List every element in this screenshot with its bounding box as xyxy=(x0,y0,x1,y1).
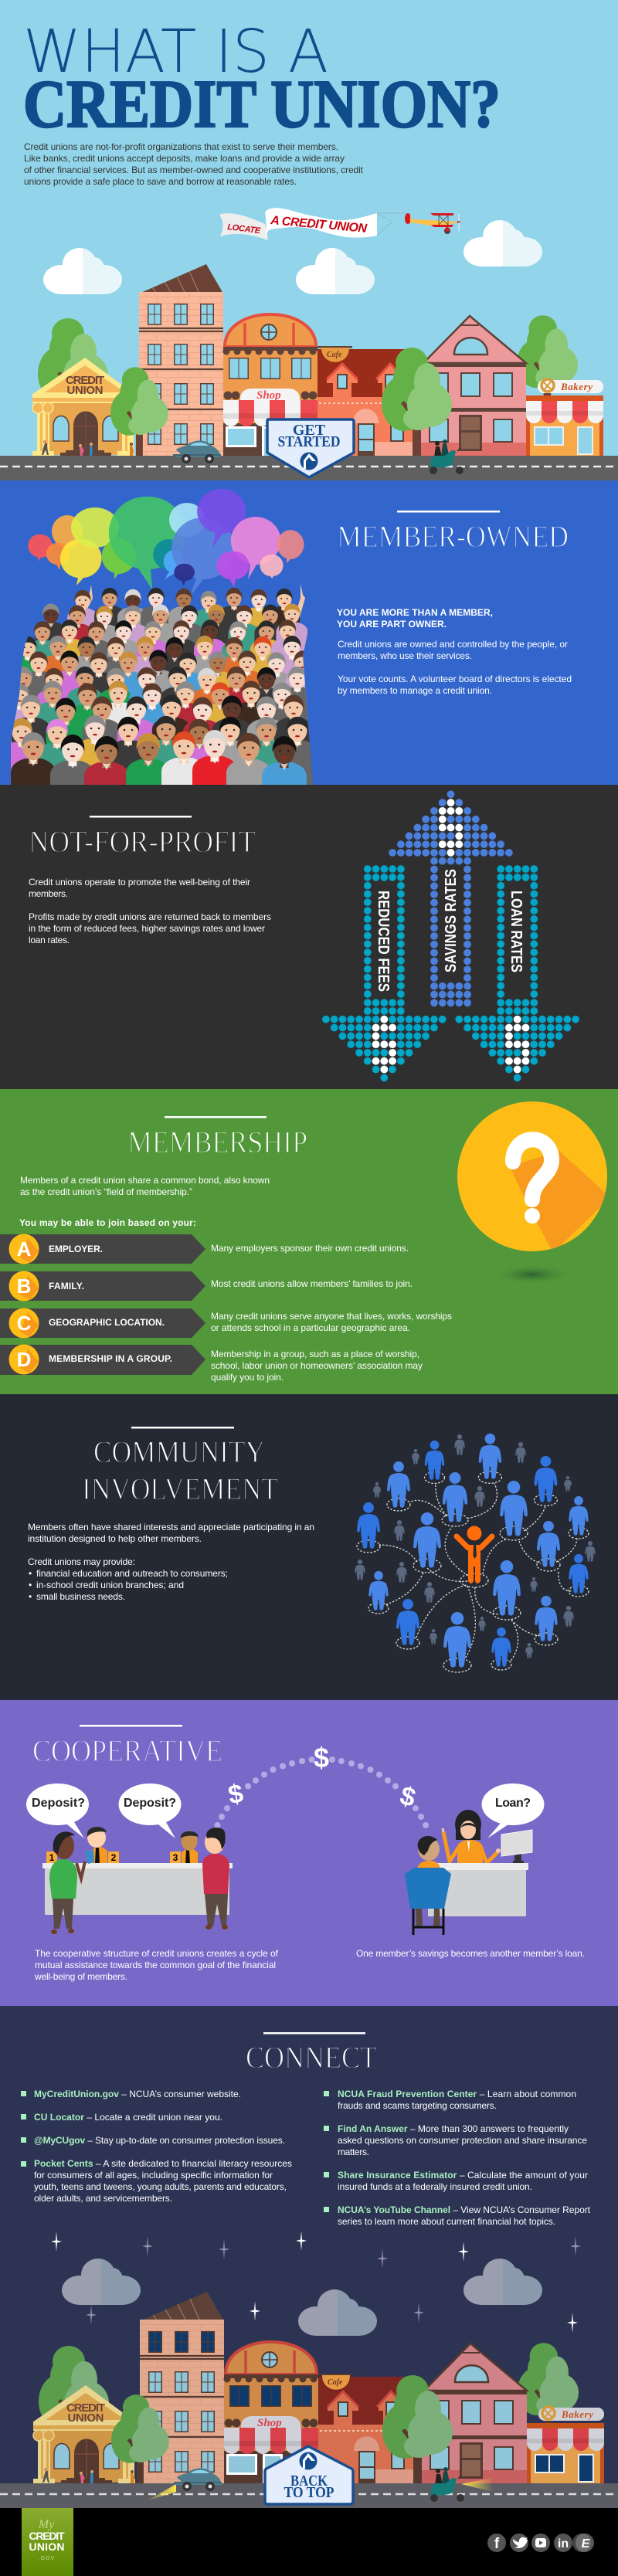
link list: left column: MyCreditUnion.gov – NCUA’s consumer website. xyxy=(34,2089,241,2099)
link list: left column xyxy=(21,2089,292,2204)
illustration: day town xyxy=(32,264,603,474)
row b: family: FAMILY. xyxy=(49,1281,84,1291)
banner: locate a credit union: LOCATE xyxy=(227,222,261,236)
intro text xyxy=(24,141,364,187)
link list: left column: CU Locator – Locate a credit union near you. xyxy=(34,2112,222,2123)
illustration: speech bubbles xyxy=(28,489,304,596)
sign text: night shop, cafe, bakery: Shop xyxy=(257,2417,282,2429)
faint stars xyxy=(86,2236,581,2325)
dotted arrow: reduced fees down: REDUCED FEES xyxy=(375,891,392,992)
panel: hero sky xyxy=(0,0,618,480)
night car wheels and scooter xyxy=(175,2478,464,2502)
dollar signs: $ xyxy=(397,1781,419,1813)
headlights xyxy=(146,2478,493,2501)
dotted arrow: loan rates down xyxy=(459,869,576,1078)
text block: by members to manage a credit union. xyxy=(338,685,492,696)
divider and heading: not-for-profit: NOT-FOR-PROFIT xyxy=(29,824,256,859)
link list: right column xyxy=(324,2089,591,2227)
speech bubble: deposit 2 xyxy=(119,1784,181,1838)
text block with list xyxy=(28,1522,314,1602)
sign text: shop, cafe, bakery: Bakery xyxy=(560,381,593,392)
dotted arrow: savings rates up xyxy=(392,794,509,1003)
illustration: loan desk xyxy=(405,1784,544,1935)
row a: employer: A xyxy=(17,1237,32,1261)
dollar signs xyxy=(226,1742,419,1813)
button: back to top xyxy=(265,2446,353,2504)
link list: left column: Pocket Cents – A site dedicated to financial literacy resources xyxy=(34,2158,292,2169)
crowd rows back to front xyxy=(11,587,313,785)
divider and heading: membership: MEMBERSHIP xyxy=(127,1125,307,1159)
tellers and number cards xyxy=(46,1827,199,1863)
footer xyxy=(0,2508,618,2576)
sign text: credit union: CREDIT xyxy=(66,374,104,387)
sign text: night credit union xyxy=(66,2401,105,2425)
text block with list: small business needs. xyxy=(36,1591,125,1602)
panel: community involvement xyxy=(0,1394,618,1700)
sign text: night shop, cafe, bakery xyxy=(257,2378,593,2429)
sign text: shop, cafe, bakery xyxy=(256,351,593,402)
intro text: Like banks, credit unions accept deposits, make loans and provide a wide array xyxy=(24,153,345,164)
intro text: of other financial services. But as member-owned and cooperative institutions, credit xyxy=(24,165,364,175)
link list: right column: Share Insurance Estimator – Calculate the amount of your xyxy=(338,2170,588,2181)
icon: night clouds xyxy=(62,2259,542,2336)
panel: membership xyxy=(0,1089,618,1394)
text block with list: financial education and outreach to consumers; xyxy=(36,1568,228,1579)
row c: geographic location: or attends school in a particular geographic area. xyxy=(211,1322,410,1333)
sign text: night shop, cafe, bakery: Cafe xyxy=(328,2378,343,2387)
divider and heading: community involvement: INVOLVEMENT xyxy=(82,1471,278,1506)
button: back to top: TO TOP xyxy=(284,2484,334,2501)
row d: membership in a group: D xyxy=(17,1348,31,1371)
social icons: in xyxy=(558,2537,569,2551)
car wheels above road xyxy=(176,454,464,474)
panel: member-owned xyxy=(0,480,618,785)
night road xyxy=(0,2483,618,2508)
orange central person xyxy=(457,1526,492,1583)
intro text: Credit unions are not-for-profit organizations that exist to serve their members. xyxy=(24,141,338,152)
speech bubble: deposit 1: Deposit? xyxy=(32,1797,85,1810)
sign text: credit union xyxy=(66,374,104,397)
text block: members. xyxy=(29,888,68,899)
text block: savings loan: One member’s savings becomes another member’s loan. xyxy=(356,1948,585,1959)
text block with list: Members often have shared interests and appreciate participating in an xyxy=(28,1522,314,1532)
divider and heading: community involvement: COMMUNITY xyxy=(93,1434,265,1469)
text block: Profits made by credit unions are returned back to members xyxy=(29,911,271,922)
row c: geographic location: C xyxy=(17,1312,32,1335)
text block: Your vote counts. A volunteer board of directors is elected xyxy=(338,674,572,684)
money arc dots xyxy=(215,1756,429,1828)
row a: employer xyxy=(0,1234,409,1264)
link list: right column: NCUA Fraud Prevention Center – Learn about common xyxy=(338,2089,576,2099)
button: back to top: BACK xyxy=(290,2472,328,2489)
tellers and number cards: 2 xyxy=(111,1852,117,1863)
small grey people xyxy=(355,1434,596,1658)
speech bubble: loan: Loan? xyxy=(495,1797,531,1810)
link list: right column: frauds and scams targeting consumers. xyxy=(338,2100,497,2111)
monitor xyxy=(501,1830,532,1863)
illustration: deposit counter xyxy=(26,1784,233,1934)
row d: membership in a group xyxy=(0,1344,423,1383)
dotted arrow: savings rates up: SAVINGS RATES xyxy=(443,869,460,972)
banner: locate a credit union: A CREDIT UNION xyxy=(270,214,368,236)
row d: membership in a group: qualify you to join. xyxy=(211,1372,284,1383)
social icons: E xyxy=(582,2537,591,2551)
sign text: shop, cafe, bakery: Cafe xyxy=(327,351,342,359)
dollar signs: $ xyxy=(226,1779,246,1811)
row b: family xyxy=(0,1271,413,1301)
divider and heading: cooperative: COOPERATIVE xyxy=(32,1733,222,1768)
dotted arrow: reduced fees down xyxy=(326,869,443,1078)
logo: .GOV xyxy=(39,2556,55,2561)
divider and heading: connect: CONNECT xyxy=(246,2040,377,2075)
text block: members, who use their services. xyxy=(338,650,472,661)
logo: UNION xyxy=(29,2540,65,2553)
subheading xyxy=(337,607,493,630)
row a: employer: EMPLOYER. xyxy=(49,1244,103,1254)
link list: right column: matters. xyxy=(338,2147,369,2157)
link list: right column: series to learn more about current financial hot topics. xyxy=(338,2216,555,2227)
sign text: night shop, cafe, bakery: Bakery xyxy=(561,2408,593,2420)
dashed links xyxy=(357,1471,589,1672)
link list: right column: NCUA’s YouTube Channel – View NCUA’s Consumer Report xyxy=(338,2204,591,2215)
panel: cooperative xyxy=(0,1700,618,2006)
shadow below question mark xyxy=(492,1264,572,1285)
speech bubble: loan xyxy=(482,1784,544,1838)
sign text: night credit union: UNION xyxy=(68,2411,104,2425)
row b: family: Most credit unions allow members’ families to join. xyxy=(211,1278,413,1289)
logo: My xyxy=(38,2518,55,2531)
text block: cycle xyxy=(34,1948,279,1982)
decorative stars xyxy=(51,2231,578,2333)
logo xyxy=(22,2508,73,2576)
title: what is a: WHAT IS A xyxy=(23,18,328,87)
text block with list: institution designed to help other members. xyxy=(28,1533,202,1544)
panel: not-for-profit xyxy=(0,785,618,1090)
sign text: credit union: UNION xyxy=(66,384,104,397)
customer in red xyxy=(202,1828,229,1929)
illustration: people network xyxy=(355,1434,596,1672)
text block: cycle: mutual assistance towards the common goal of the financial xyxy=(35,1960,276,1970)
sign text: night credit union: CREDIT xyxy=(66,2401,105,2415)
link list: left column: youth, teens and tweens, young adults, parents and educators, xyxy=(34,2181,287,2192)
text block xyxy=(338,639,572,696)
row c: geographic location xyxy=(0,1308,452,1338)
dotted arrow: loan rates down: LOAN RATES xyxy=(508,891,525,972)
row b: family: B xyxy=(17,1274,31,1298)
intro text: unions provide a safe place to save and borrow at reasonable rates. xyxy=(24,176,297,187)
row c: geographic location: Many credit unions serve anyone that lives, works, worships xyxy=(211,1311,452,1322)
speech bubble: deposit 1 xyxy=(26,1784,89,1838)
text block with list: Credit unions may provide: xyxy=(28,1556,135,1567)
link list: left column: older adults, and servicemembers. xyxy=(34,2193,172,2204)
link list: left column: @MyCUgov – Stay up-to-date on consumer protection issues. xyxy=(34,2135,285,2146)
link list: right column: Find An Answer – More than 300 answers to frequently xyxy=(338,2123,569,2134)
text block: as the credit union’s “field of membership.” xyxy=(20,1186,192,1197)
icon: clouds xyxy=(43,220,542,294)
text block: loan rates. xyxy=(29,935,70,945)
tellers and number cards: 3 xyxy=(173,1852,178,1863)
counter xyxy=(42,1863,233,1915)
row d: membership in a group: school, labor union or homeowners’ association may xyxy=(211,1360,423,1371)
text block: in the form of reduced fees, higher savings rates and lower xyxy=(29,923,265,934)
desk xyxy=(427,1863,528,1916)
row a: employer: Many employers sponsor their own credit unions. xyxy=(211,1243,409,1254)
text block: Credit unions operate to promote the well-being of their xyxy=(29,877,250,888)
icon: question mark xyxy=(457,1101,610,1253)
scooter redraw above road xyxy=(430,450,456,467)
row d: membership in a group: MEMBERSHIP IN A GROUP. xyxy=(49,1353,172,1364)
row c: geographic location: GEOGRAPHIC LOCATION. xyxy=(49,1317,165,1328)
dollar signs: $ xyxy=(314,1742,329,1773)
button: get started: GET xyxy=(293,422,326,439)
blue people xyxy=(357,1434,589,1668)
logo: CREDIT xyxy=(29,2530,65,2542)
text block xyxy=(19,1175,270,1228)
link list: left column: for consumers of all ages, including specific information for xyxy=(34,2170,273,2181)
text block xyxy=(29,877,271,945)
customer in green xyxy=(49,1831,94,1934)
illustration: night town xyxy=(32,2292,604,2502)
social icons: f xyxy=(494,2536,500,2552)
panel: connect xyxy=(0,2006,618,2508)
subheading: YOU ARE PART OWNER. xyxy=(337,619,447,630)
raised hands xyxy=(87,584,305,618)
text block with list: • xyxy=(29,1580,32,1590)
text block with list: • xyxy=(29,1568,32,1579)
banner: locate a credit union xyxy=(219,208,406,240)
text block: Members of a credit union share a common bond, also known xyxy=(20,1175,270,1186)
button: get started xyxy=(267,419,354,477)
title: credit union: CREDIT UNION? xyxy=(23,67,501,142)
text block with list: • xyxy=(29,1591,32,1602)
loan officer xyxy=(443,1810,501,1863)
text block with list: in-school credit union branches; and xyxy=(36,1580,184,1590)
social icons xyxy=(487,2534,594,2552)
text block: You may be able to join based on your: xyxy=(19,1217,196,1228)
link list: right column: asked questions on consumer protection and share insurance xyxy=(338,2135,587,2146)
subheading: YOU ARE MORE THAN A MEMBER, xyxy=(337,607,493,618)
divider and heading: member-owned: MEMBER-OWNED xyxy=(337,519,569,554)
customer in chair xyxy=(405,1836,451,1935)
tellers and number cards: 1 xyxy=(49,1852,55,1863)
button: get started: STARTED xyxy=(278,433,340,450)
icon: airplane xyxy=(405,213,461,234)
text block: cycle: well-being of members. xyxy=(34,1971,127,1982)
link list: right column: insured funds at a federally insured credit union. xyxy=(338,2181,532,2192)
road xyxy=(0,456,618,480)
row d: membership in a group: Membership in a group, such as a place of worship, xyxy=(211,1349,419,1359)
illustration: crowd of people xyxy=(11,584,313,785)
divider and heading: community involvement xyxy=(82,1427,278,1506)
text block: cycle: The cooperative structure of credit unions creates a cycle of xyxy=(35,1948,279,1959)
speech bubble: deposit 2: Deposit? xyxy=(124,1797,176,1810)
text block: Credit unions are owned and controlled by the people, or xyxy=(338,639,568,650)
sign text: shop, cafe, bakery: Shop xyxy=(256,389,281,402)
